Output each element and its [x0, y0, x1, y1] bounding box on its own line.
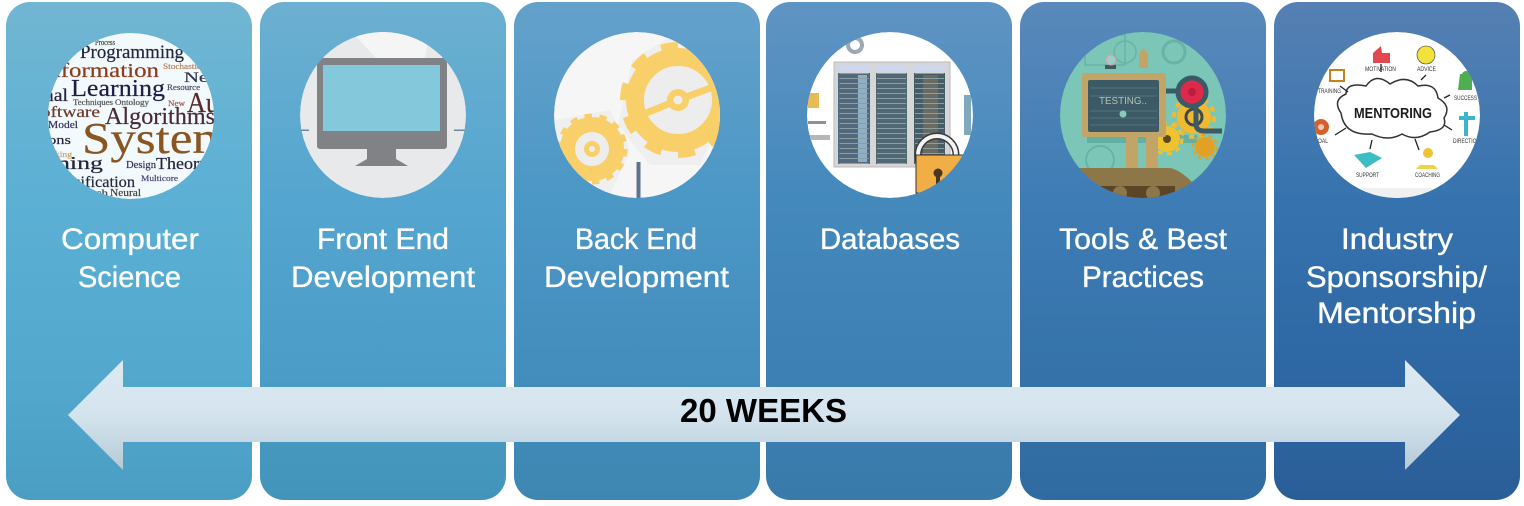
icon: mentoring cloud: MOTIVATION: [1365, 67, 1396, 73]
icon: word cloud: [48, 33, 214, 199]
heading: computer science: Science: [78, 261, 181, 294]
icon: word cloud: Programming: [80, 42, 184, 63]
icon: server racks with padlock: [807, 32, 973, 198]
panel: computer science: [6, 2, 252, 500]
icon: word cloud: New: [168, 99, 185, 108]
icon: gears: [554, 32, 720, 198]
icon: mentoring cloud: COACHING: [1415, 173, 1440, 179]
panel: front end development: [260, 2, 506, 500]
panel: back end development: [514, 2, 760, 500]
icon: word cloud: Ontology: [115, 98, 149, 107]
icon: mentoring cloud: GOAL: [1314, 139, 1329, 145]
panel: databases: [766, 2, 1012, 500]
icon: word cloud: Au: [187, 88, 219, 119]
icon: word cloud: ons: [48, 132, 71, 147]
icon: word cloud: Algorithms: [105, 104, 215, 130]
icon: word cloud: Process: [95, 38, 115, 47]
heading: computer science: Computer: [61, 223, 199, 256]
icon: word cloud: oning: [44, 153, 103, 173]
heading: back end development: Back End: [575, 223, 697, 256]
icon: testing machine: [1060, 32, 1226, 200]
icon: mentoring cloud: ADVICE: [1417, 67, 1436, 73]
icon: word cloud: onal: [34, 85, 68, 105]
double-headed arrow: [68, 360, 1460, 470]
heading: tools and best practices: Tools & Best: [1059, 223, 1228, 256]
arrow: 20 weeks timeline: [68, 360, 1460, 470]
heading: databases: Databases: [820, 223, 960, 256]
icon: word cloud: Stochastic: [163, 62, 202, 71]
heading: industry sponsorship / mentorship: Sponsorship/: [1306, 261, 1488, 294]
panel background: [766, 2, 1012, 500]
icon: testing machine: TESTING..: [1099, 96, 1147, 107]
icon: word cloud: Techniques: [73, 98, 113, 107]
heading: industry sponsorship / mentorship: Mentorship: [1317, 297, 1476, 330]
heading: back end development: Development: [544, 261, 730, 294]
heading: front end development: Development: [291, 261, 476, 294]
icon: mentoring cloud: [1313, 32, 1480, 198]
icon: word cloud: Classification: [45, 174, 135, 191]
panel background: [6, 2, 252, 500]
panel background: [1020, 2, 1266, 500]
icon: word cloud: Information: [40, 60, 159, 82]
icon: word cloud: Learning: [71, 76, 165, 102]
heading: industry sponsorship / mentorship: Industry: [1341, 223, 1453, 256]
icon: word cloud: Design: [126, 160, 156, 171]
icon: word cloud: Ne: [184, 70, 208, 86]
icon: word cloud: System: [82, 114, 232, 163]
icon: mentoring cloud: SUCCESS: [1454, 96, 1477, 102]
panel: tools and best practices: [1020, 2, 1266, 500]
icon: word cloud: Theory: [156, 154, 209, 173]
icon: word cloud: Resource: [167, 83, 200, 92]
panel: industry sponsorship and mentorship: [1274, 2, 1520, 500]
icon: word cloud: Software: [30, 104, 100, 121]
panel background: [1274, 2, 1520, 500]
icon: mentoring cloud: DIRECTION: [1453, 139, 1480, 145]
icon: word cloud: Multicore: [141, 174, 179, 183]
icon: mentoring cloud: SUPPORT: [1356, 173, 1379, 179]
icon: mentoring cloud: TRAINING: [1318, 89, 1341, 95]
heading: front end development: Front End: [317, 223, 449, 256]
icon: word cloud: king: [55, 150, 72, 159]
icon: mentoring cloud: MENTORING: [1354, 105, 1432, 122]
heading: tools and best practices: Practices: [1082, 261, 1204, 294]
icon: word cloud: earch: [80, 188, 109, 198]
panel background: [260, 2, 506, 500]
icon: monitor: [300, 30, 466, 198]
arrow label: 20 WEEKS: [680, 392, 847, 429]
panel background: [514, 2, 760, 500]
icon: word cloud: Neural: [110, 188, 141, 199]
icon: word cloud: Model: [48, 120, 78, 131]
